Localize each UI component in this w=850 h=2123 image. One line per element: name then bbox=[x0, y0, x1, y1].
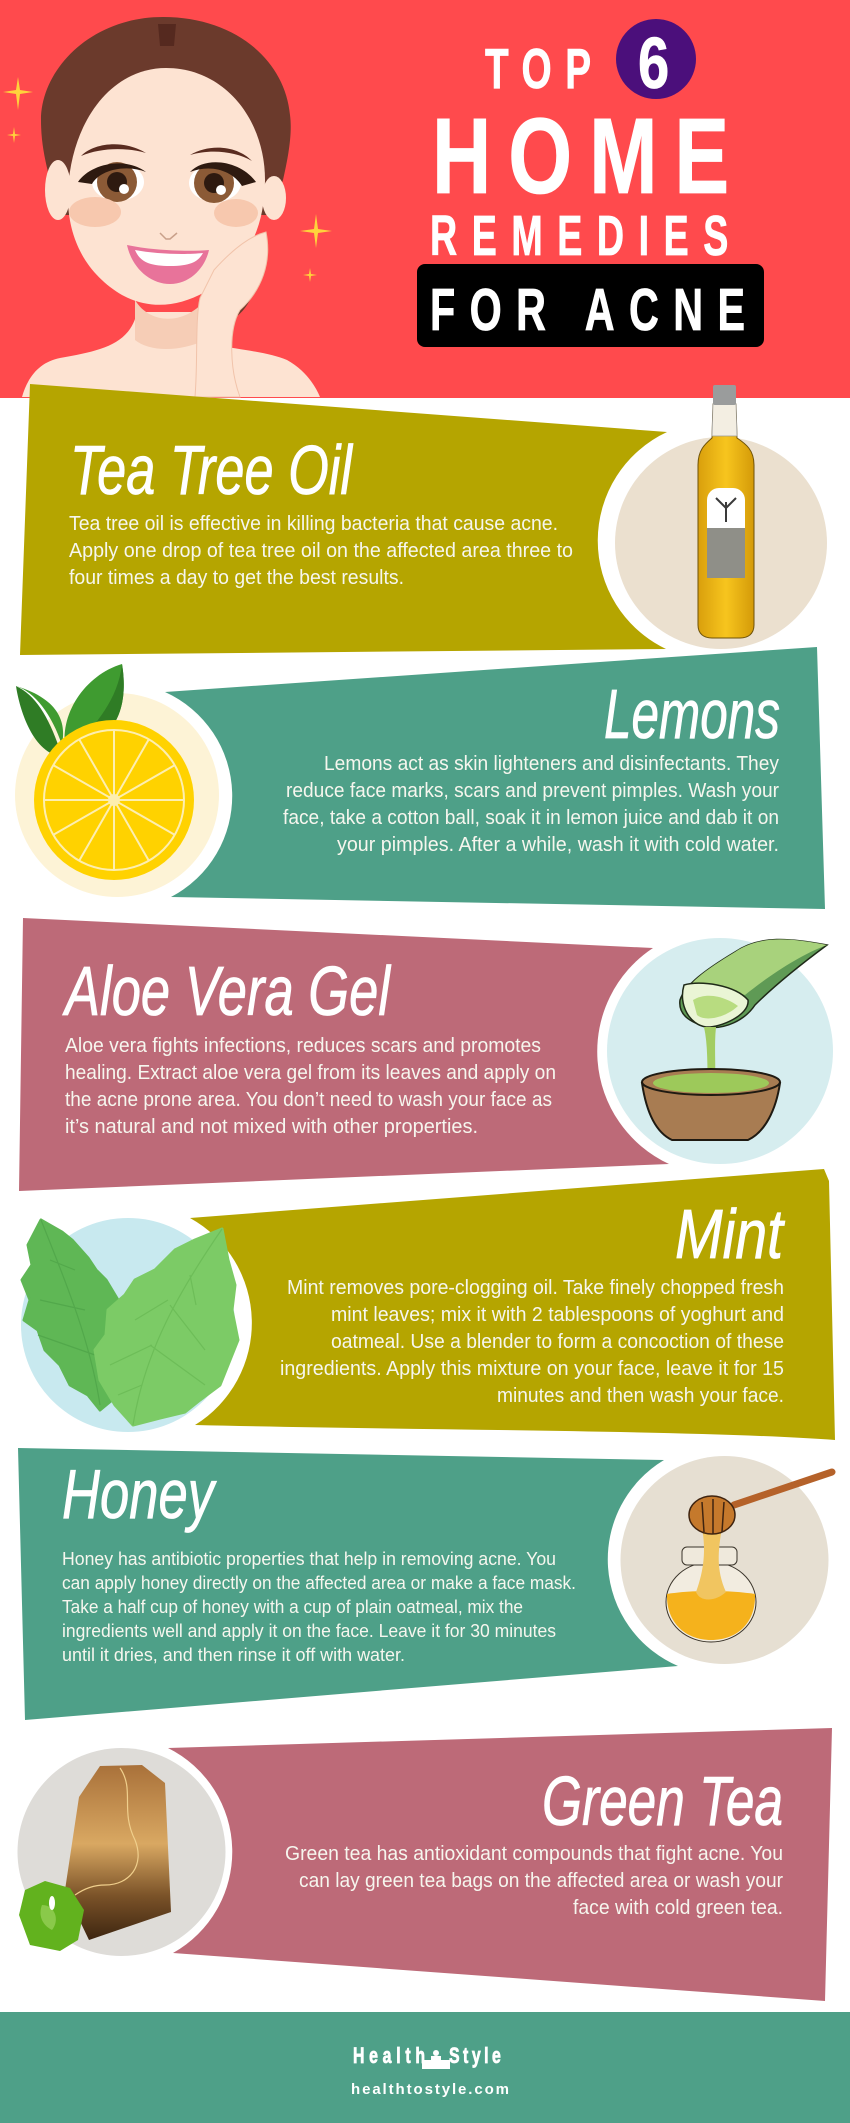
text: lemons description: face, take a cotton ball, soak it in lemon juice and dab it on bbox=[283, 807, 779, 829]
text: lemons description bbox=[283, 753, 779, 856]
text: mint description: ingredients. Apply this mixture on your face, leave it for 15 bbox=[280, 1358, 784, 1380]
text: aloe vera description bbox=[65, 1035, 556, 1138]
text: lemons description: your pimples. After a while, wash it with cold water. bbox=[337, 834, 779, 856]
text: mint description bbox=[280, 1277, 784, 1407]
title: top 6 home remedies for acne: HOME bbox=[432, 96, 729, 217]
header band bbox=[0, 0, 850, 398]
panel: lemons bbox=[165, 647, 825, 909]
title: top 6 home remedies for acne: 6 bbox=[638, 23, 669, 104]
text: tea tree oil description bbox=[69, 513, 573, 589]
footer band bbox=[0, 2012, 850, 2123]
heading: mint: Mint bbox=[675, 1195, 785, 1273]
text: honey description: Take a half cup of honey with a cup of plain oatmeal, mix the bbox=[62, 1597, 523, 1617]
text: honey description: Honey has antibiotic properties that help in removing acne. You bbox=[62, 1549, 556, 1569]
text: lemons description: reduce face marks, scars and prevent pimples. Wash your bbox=[286, 780, 779, 802]
text: mint description: Mint removes pore-clogging oil. Take finely chopped fresh bbox=[287, 1277, 784, 1299]
text: tea tree oil description: four times a day to get the best results. bbox=[69, 567, 404, 589]
icon: sparkles bbox=[3, 77, 332, 282]
panel: mint bbox=[190, 1169, 835, 1440]
text: tea tree oil description: Tea tree oil is effective in killing bacteria that cause acne. bbox=[69, 513, 558, 535]
illustration: smiling woman bbox=[22, 17, 320, 397]
text: green tea description: can lay green tea bags on the affected area or wash your bbox=[299, 1870, 783, 1892]
text: aloe vera description: Aloe vera fights infections, reduces scars and promotes bbox=[65, 1035, 541, 1057]
footer logo bbox=[353, 2045, 501, 2069]
text: honey description: ingredients well and apply it on the face. Leave it for 30 minutes bbox=[62, 1621, 556, 1641]
title: top 6 home remedies for acne: REMEDIES bbox=[430, 204, 728, 268]
text: mint description: minutes and then wash your face. bbox=[497, 1385, 784, 1407]
panel: aloe vera gel bbox=[19, 918, 669, 1191]
text: green tea description: Green tea has antioxidant compounds that fight acne. You bbox=[285, 1843, 783, 1865]
icon: lemon slice with leaves bbox=[15, 664, 219, 897]
text: green tea description: face with cold green tea. bbox=[573, 1897, 783, 1919]
heading: lemons: Lemons bbox=[604, 675, 780, 753]
text: honey description: until it dries, and then rinse it off with water. bbox=[62, 1645, 405, 1665]
text: aloe vera description: the acne prone area. You don’t need to wash your face as bbox=[65, 1089, 552, 1111]
icon: tea bag bbox=[18, 1748, 226, 1956]
panel: green tea bbox=[168, 1728, 832, 2001]
text: aloe vera description: healing. Extract aloe vera gel from its leaves and apply on bbox=[65, 1062, 556, 1084]
footer url: healthtostyle.com bbox=[351, 2081, 509, 2098]
title: top 6 home remedies for acne bbox=[417, 19, 764, 347]
icon: aloe leaf and bowl bbox=[607, 938, 833, 1164]
text: tea tree oil description: Apply one drop of tea tree oil on the affected area three to bbox=[69, 540, 573, 562]
heading: honey: Honey bbox=[62, 1455, 217, 1533]
text: mint description: mint leaves; mix it with 2 tablespoons of yoghurt and bbox=[331, 1304, 784, 1326]
text: honey description bbox=[62, 1549, 576, 1665]
footer logo: Health bbox=[353, 2045, 425, 2069]
icon: oil bottle on beige circle bbox=[615, 385, 827, 649]
heading: aloe vera gel: Aloe Vera Gel bbox=[62, 952, 392, 1030]
icon: honey jar and dipper bbox=[620, 1456, 832, 1664]
panel: tea tree oil bbox=[20, 384, 667, 655]
text: mint description: oatmeal. Use a blender to form a concoction of these bbox=[331, 1331, 784, 1353]
heading: tea tree oil: Tea Tree Oil bbox=[70, 431, 354, 509]
title: top 6 home remedies for acne: FOR ACNE bbox=[430, 277, 745, 343]
icon: mint leaves bbox=[21, 1218, 238, 1432]
text: green tea description bbox=[285, 1843, 783, 1919]
panel: honey bbox=[18, 1448, 678, 1720]
title: top 6 home remedies for acne: TOP bbox=[485, 38, 591, 101]
text: aloe vera description: it’s natural and not mixed with other properties. bbox=[65, 1116, 478, 1138]
footer logo: Style bbox=[449, 2045, 501, 2069]
text: honey description: can apply honey directly on the affected area or make a face mask. bbox=[62, 1573, 576, 1593]
text: lemons description: Lemons act as skin lighteners and disinfectants. They bbox=[324, 753, 779, 775]
